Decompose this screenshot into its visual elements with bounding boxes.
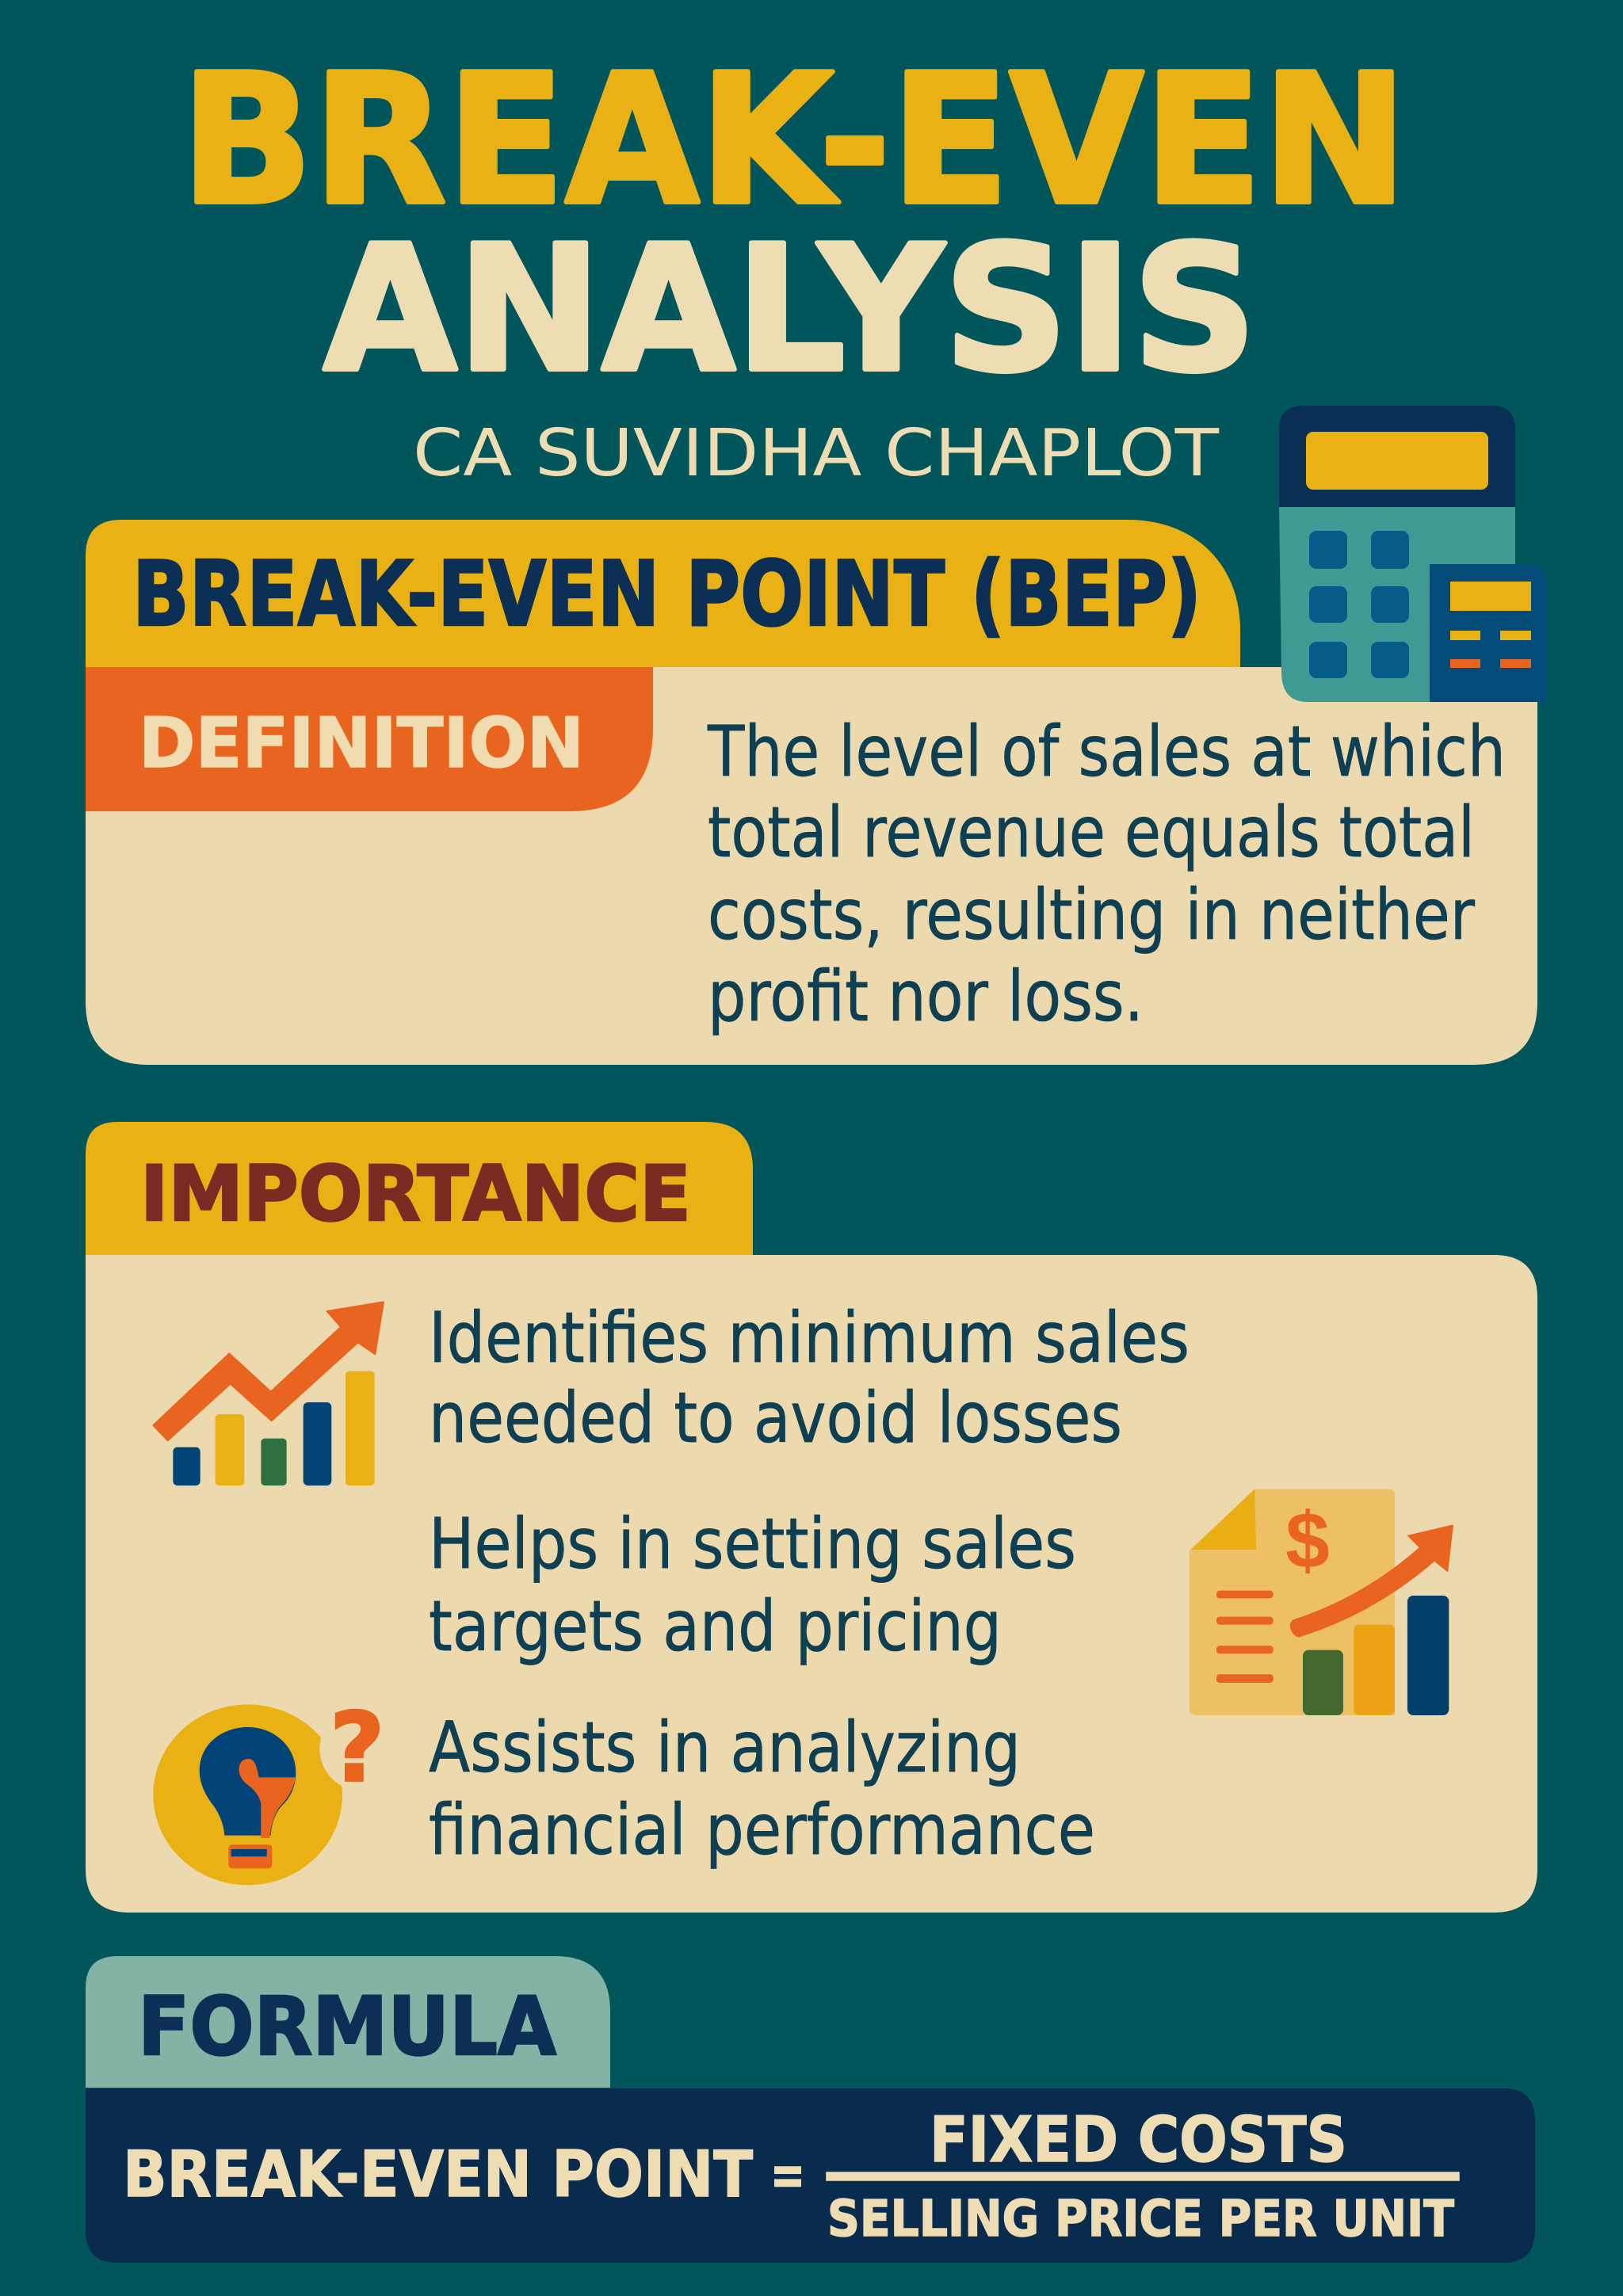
importance point 3: financial performance bbox=[429, 1789, 1095, 1871]
heading: importance: IMPORTANCE bbox=[140, 1150, 691, 1238]
formula tab bbox=[86, 1956, 610, 2088]
formula card bbox=[86, 2088, 1535, 2263]
definition tab: DEFINITION bbox=[139, 703, 584, 784]
definition text bbox=[707, 711, 1506, 1037]
panel: importance bbox=[86, 1122, 1537, 1913]
title: ANALYSIS bbox=[323, 208, 1257, 410]
importance tab bbox=[86, 1122, 753, 1255]
BEP heading tab bbox=[86, 520, 1240, 667]
definition tab bbox=[86, 667, 653, 811]
importance point 2: Helps in setting sales bbox=[429, 1503, 1076, 1585]
icon: rising bar chart bbox=[153, 1302, 384, 1486]
importance point 2: targets and pricing bbox=[429, 1585, 1002, 1667]
importance point 2 bbox=[429, 1503, 1076, 1667]
importance point 1: Identifies minimum sales bbox=[429, 1297, 1190, 1379]
panel: formula bbox=[86, 1956, 1535, 2263]
importance point 3: Assists in analyzing bbox=[429, 1707, 1021, 1788]
importance point 1 bbox=[429, 1297, 1190, 1459]
heading: formula: FORMULA bbox=[138, 1980, 556, 2074]
icon: lightbulb with question mark bbox=[153, 1693, 404, 1885]
title: BREAK-EVEN bbox=[181, 36, 1407, 245]
title bbox=[181, 36, 1407, 410]
definition text: The level of sales at which bbox=[707, 711, 1506, 792]
formula expression: = bbox=[770, 2142, 805, 2208]
importance point 3 bbox=[429, 1707, 1095, 1871]
author subtitle: CA SUVIDHA CHAPLOT bbox=[413, 416, 1220, 491]
icon: calculator bbox=[1279, 406, 1547, 702]
heading: break-even point: BREAK-EVEN POINT (BEP) bbox=[132, 542, 1201, 646]
definition text: profit nor loss. bbox=[708, 955, 1144, 1037]
icon: lightbulb with question mark: ? bbox=[330, 1693, 384, 1803]
definition text: costs, resulting in neither bbox=[708, 874, 1476, 955]
definition card bbox=[86, 667, 1537, 1065]
icon: financial report with chart bbox=[1190, 1489, 1453, 1715]
importance card bbox=[86, 1255, 1537, 1913]
formula expression bbox=[123, 2103, 1459, 2248]
icon: financial report with chart: $ bbox=[1285, 1496, 1330, 1585]
importance point 1: needed to avoid losses bbox=[429, 1377, 1122, 1459]
formula expression: FIXED COSTS bbox=[930, 2103, 1347, 2176]
panel: break-even point definition bbox=[86, 520, 1537, 1065]
formula expression: BREAK-EVEN POINT bbox=[123, 2138, 753, 2211]
definition text: total revenue equals total bbox=[708, 791, 1475, 873]
formula expression: SELLING PRICE PER UNIT bbox=[827, 2190, 1454, 2248]
